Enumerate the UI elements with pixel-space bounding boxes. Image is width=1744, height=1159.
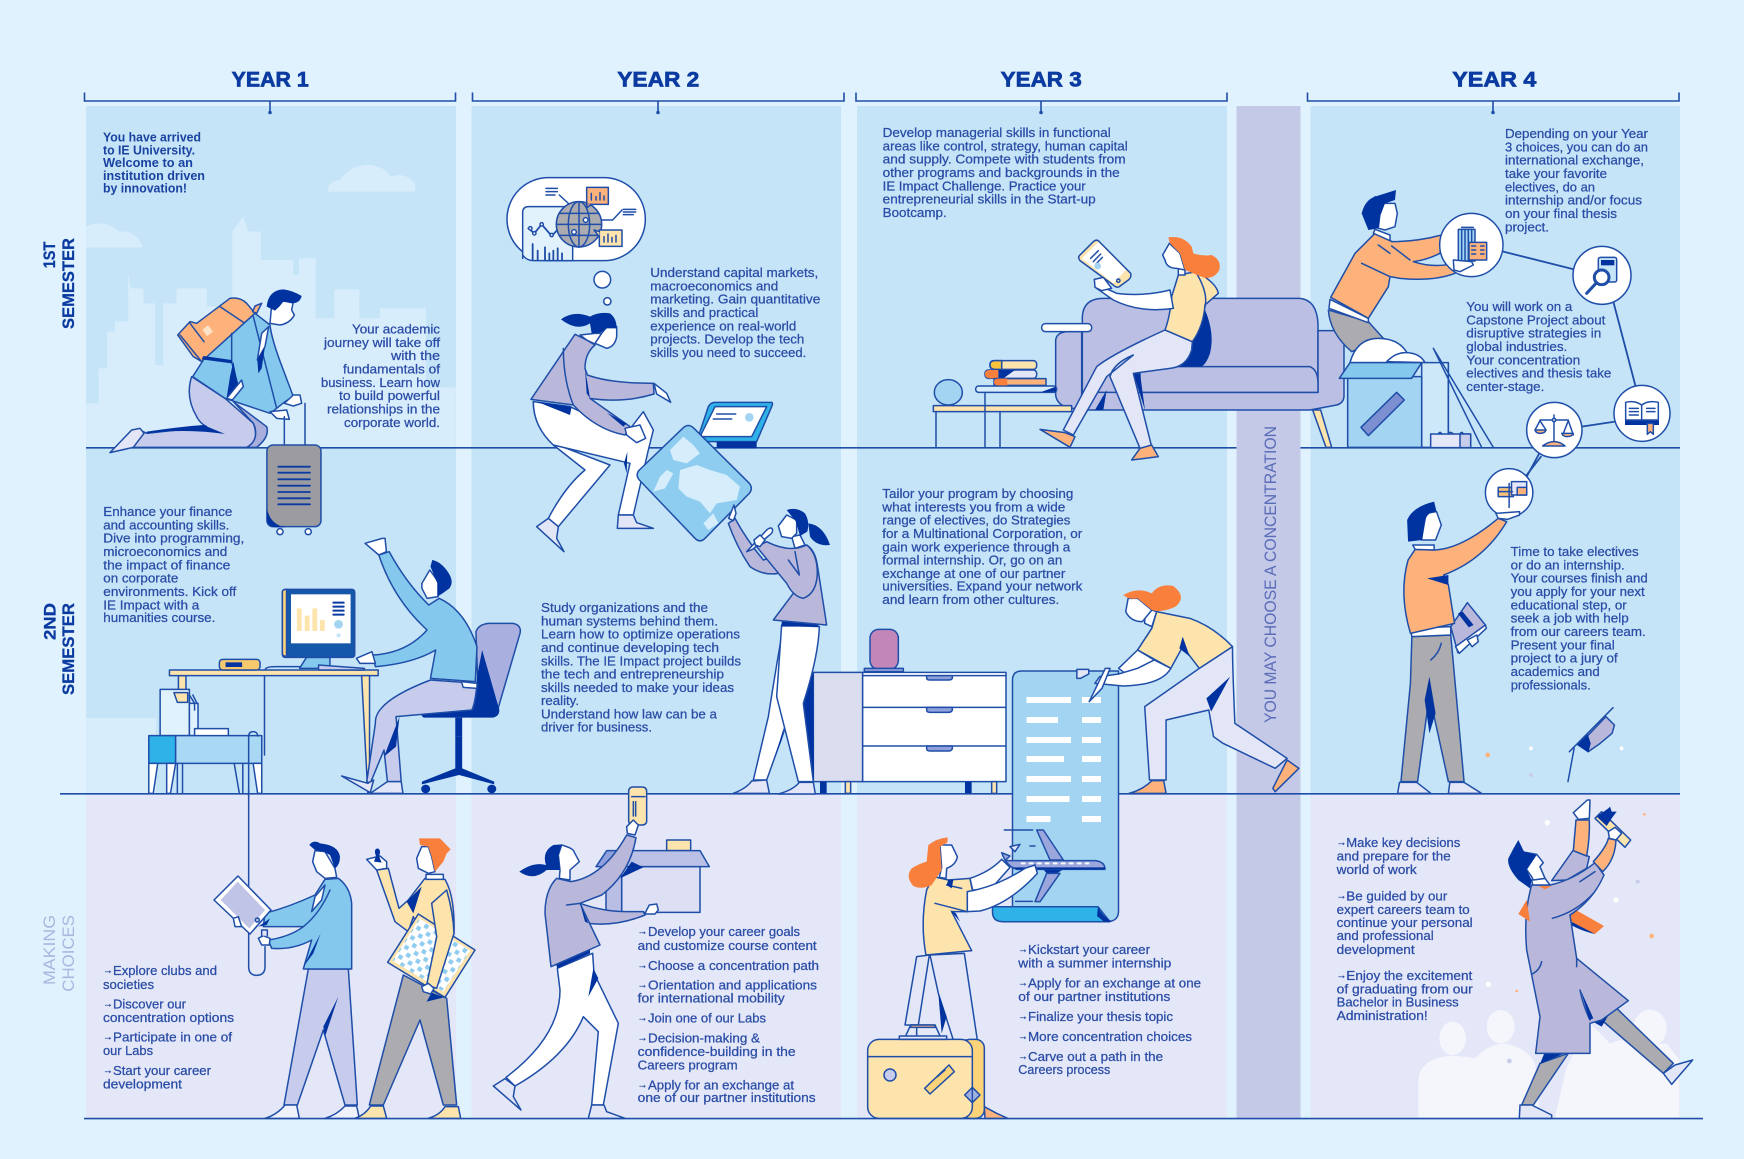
illustration: flying graduation cap with confetti [1485, 708, 1623, 782]
icon circle: book [1614, 385, 1670, 441]
list: year 2 making choices: confidence-building in the [638, 1044, 796, 1059]
list: year 2 making choices: → [638, 960, 648, 971]
text: year 3 semester 2: and learn from other cultures. [882, 592, 1059, 607]
text: year 1 welcome [103, 130, 205, 196]
list: year 2 making choices: Decision-making & [648, 1030, 760, 1046]
text: year 4 semester 2: academics and [1511, 664, 1600, 679]
illustration: year 4 man with icon circles [1328, 190, 1670, 477]
illustration: sofa and side table [933, 298, 1344, 448]
text: year 4 semester 2: Present your final [1511, 637, 1615, 652]
text: year 3 semester 2: what interests you from a wide [881, 499, 1065, 514]
thought bubble [507, 178, 645, 305]
illustration: scroll list [992, 671, 1118, 922]
text: year 1 semester 1: with the [390, 348, 440, 363]
text: year 1 semester 1: corporate world. [344, 415, 440, 430]
list: year 4 making choices: and prepare for the [1337, 848, 1451, 864]
row label: 1st semester: 1ST [40, 241, 59, 268]
list: year 4 making choices [1336, 835, 1473, 1023]
crowd silhouettes [1418, 1010, 1679, 1117]
connecting lines [1503, 252, 1636, 477]
text: year 2 semester 1: marketing. Gain quantitative [650, 292, 820, 307]
list: year 2 making choices: Orientation and applications [648, 978, 817, 992]
text: year 4 semester 1 capstone: electives and thesis take [1466, 366, 1611, 381]
panel: year columns [86, 106, 1680, 1118]
illustration: student with tablet [214, 790, 359, 1118]
list: year 4 making choices: → [1336, 837, 1346, 848]
list: year 1 making choices: → [103, 1032, 113, 1043]
icon circle: buildings [1440, 213, 1503, 277]
list: year 4 making choices: and professional [1337, 928, 1434, 943]
text: year 3 semester 2 [881, 486, 1083, 607]
text: year 3 semester 2: exchange at one of our partner [882, 566, 1066, 581]
text: year 1 semester 2: environments. Kick off [103, 584, 237, 599]
text: year 3 semester 1 [883, 125, 1128, 220]
row label: 2nd semester [40, 603, 78, 695]
text: year 4 semester 1 capstone: disruptive strategies in [1466, 326, 1601, 341]
title: year 2: YEAR 2 [617, 69, 699, 92]
band label: concentration: YOU MAY CHOOSE A CONCENTRATION [1261, 426, 1280, 723]
text: year 4 semester 2: from our careers team. [1511, 624, 1646, 639]
row label: 2nd semester: 2ND [40, 603, 60, 640]
icon circle: flag [1485, 457, 1541, 517]
row label: 2nd semester: SEMESTER [59, 603, 78, 695]
text: year 3 semester 1: IE Impact Challenge. Practice your [883, 178, 1086, 193]
text: year 3 semester 1: entrepreneurial skills in the Start-up [883, 192, 1096, 207]
list: year 3 making choices: Finalize your thesis topic [1028, 1009, 1174, 1024]
text: year 2 semester 2: human systems behind them. [541, 613, 718, 628]
text: year 2 semester 2: Study organizations and the [541, 600, 708, 615]
row label: making choices: MAKING [40, 915, 59, 985]
text: year 3 semester 1: areas like control, strategy, human capital [883, 138, 1128, 153]
title: year 4: YEAR 4 [1452, 69, 1537, 92]
text: year 4 semester 1 capstone: global industries. [1466, 339, 1567, 354]
text: year 4 semester 1 top: Depending on your Year [1505, 126, 1649, 141]
text: year 4 semester 1 top: international exchange, [1505, 153, 1644, 168]
title: year 3: YEAR 3 [1001, 69, 1082, 92]
text: year 2 semester 2: skills. The IE Impact project builds [541, 653, 741, 668]
list: year 1 making choices: Discover our [113, 996, 187, 1012]
text: year 3 semester 2: universities. Expand your network [882, 579, 1083, 594]
row label: making choices: CHOICES [59, 915, 78, 992]
list: year 4 making choices: of graduating from our [1337, 982, 1473, 996]
text: year 4 semester 1 top: on your final thesis [1505, 206, 1617, 221]
list: year 3 making choices: → [1018, 1031, 1028, 1042]
text: year 4 semester 1 capstone: center-stage. [1466, 379, 1544, 394]
list: year 3 making choices: → [1018, 1011, 1028, 1022]
text: year 1 semester 2: and accounting skills. [103, 517, 229, 532]
row label: 1st semester [40, 238, 78, 329]
text: year 4 semester 2: Time to take electives [1511, 544, 1639, 559]
list: year 4 making choices: expert careers team to [1337, 902, 1470, 917]
illustration: year 3 woman writing [1077, 585, 1299, 793]
illustration: year 2 woman with thought bubble and laptop [507, 178, 772, 552]
text: year 4 semester 1 top: project. [1505, 219, 1549, 234]
box [596, 840, 709, 912]
list: year 1 making choices: concentration options [103, 1010, 234, 1025]
text: year 2 semester 2: skills needed to make your ideas [541, 680, 734, 695]
text: year 1 semester 2: the impact of finance [103, 557, 230, 572]
illustration: woman with box [493, 787, 709, 1118]
text: year 2 semester 1: experience on real-world [650, 318, 796, 333]
list: year 3 making choices: Careers process [1018, 1062, 1110, 1077]
text: year 1 semester 2: Dive into programming, [103, 531, 244, 546]
text: year 2 semester 1: skills and practical [650, 305, 758, 320]
text: year 1 semester 1: relationships in the [327, 402, 440, 416]
text: year 1 welcome: to IE University. [103, 142, 195, 157]
text: year 3 semester 2: gain work experience through a [882, 539, 1071, 554]
text: year 1 semester 2: on corporate [103, 571, 178, 586]
illustration: desk with student at computer [149, 538, 520, 797]
text: year 4 semester 2: project to a jury of [1511, 651, 1618, 666]
text: year 2 semester 1: Understand capital markets, [650, 265, 818, 280]
list: year 4 making choices: → [1336, 891, 1346, 902]
list: year 1 making choices [103, 963, 234, 1092]
text: year 1 semester 1: fundamentals of [343, 362, 440, 376]
list: year 1 making choices: Explore clubs and [113, 963, 217, 978]
illustration: year 2 woman with pen [728, 505, 1006, 794]
list: year 1 making choices: societies [103, 977, 154, 992]
text: year 4 semester 1 top: electives, do an [1505, 179, 1595, 194]
text: year 1 semester 1 [321, 322, 441, 430]
text: year 2 semester 2: driver for business. [541, 720, 652, 735]
list: year 2 making choices: → [638, 926, 648, 938]
text: year 4 semester 1 capstone: You will work on a [1466, 299, 1573, 314]
text: year 1 semester 2 [103, 504, 244, 625]
list: year 4 making choices: world of work [1336, 862, 1417, 877]
text: year 3 semester 2: for a Multinational Corporation, or [882, 526, 1083, 541]
list: year 4 making choices: Enjoy the excitement [1346, 968, 1473, 983]
list: year 3 making choices: with a summer internship [1017, 956, 1171, 970]
text: year 4 semester 1 top: 3 choices, you can do an [1505, 139, 1648, 154]
horizontal floor lines [60, 448, 1703, 1119]
list: year 2 making choices: Choose a concentration path [648, 958, 819, 973]
list: year 2 making choices: Careers program [638, 1058, 738, 1072]
list: year 3 making choices [1017, 942, 1201, 1077]
sideboard [813, 629, 1006, 793]
text: year 1 semester 1: journey will take off [323, 335, 440, 350]
list: year 2 making choices: Apply for an exchange at [648, 1078, 794, 1092]
list: year 2 making choices: → [638, 980, 648, 991]
list: year 2 making choices: → [638, 1013, 648, 1024]
list: year 2 making choices: Join one of our Labs [648, 1010, 766, 1026]
text: year 1 welcome: You have arrived [103, 130, 201, 144]
text: year 4 semester 2: educational step, or [1511, 597, 1627, 612]
list: year 2 making choices: one of our partner institutions [638, 1090, 816, 1105]
text: year 4 semester 1 capstone: Your concentration [1466, 352, 1580, 367]
list: year 4 making choices: Bachelor in Business [1337, 994, 1459, 1010]
list: year 4 making choices: Make key decisions [1346, 835, 1460, 850]
list: year 1 making choices: development [103, 1076, 182, 1092]
text: year 3 semester 1: Bootcamp. [883, 205, 947, 220]
text: year 1 semester 2: IE Impact with a [103, 597, 200, 612]
list: year 2 making choices: → [638, 1080, 648, 1091]
text: year 3 semester 1: other programs and backgrounds in the [883, 165, 1120, 180]
list: year 2 making choices: Develop your career goals [648, 924, 800, 939]
list: year 3 making choices: of our partner institutions [1018, 989, 1170, 1004]
text: year 1 welcome: Welcome to an [103, 155, 193, 170]
text: year 2 semester 1: projects. Develop the tech [650, 332, 804, 347]
title: year 1: YEAR 1 [232, 69, 309, 92]
text: year 1 semester 1: to build powerful [339, 388, 440, 403]
list: year 4 making choices: development [1337, 942, 1415, 957]
text: year 4 semester 2: or do an internship. [1511, 557, 1625, 572]
text: year 4 semester 1 top: take your favorite [1505, 166, 1607, 181]
illustration: suitcase [267, 445, 321, 535]
text: year 1 semester 1: Your academic [352, 322, 441, 336]
text: year 2 semester 2: the tech and entrepreneurship [541, 667, 724, 682]
text: year 1 semester 1: business. Learn how [321, 375, 441, 390]
text: year 2 semester 1: skills you need to succeed. [650, 345, 806, 360]
text: year 3 semester 1: and supply. Compete with students from [883, 152, 1126, 167]
text: year 1 semester 2: Enhance your finance [103, 504, 232, 519]
text: year 4 semester 2: professionals. [1511, 677, 1591, 692]
icon circle: scales [1527, 402, 1582, 458]
list: year 4 making choices: → [1336, 970, 1346, 982]
text: year 4 semester 2: seek a job with help [1511, 611, 1629, 626]
illustration: woman with airplane and suitcase [868, 830, 1105, 1118]
list: year 2 making choices: for international mobility [638, 990, 785, 1006]
text: year 4 semester 1 top: internship and/or focus [1505, 193, 1642, 208]
illustration: graduate with crowd [1418, 800, 1693, 1118]
laptop [697, 402, 772, 448]
text: year 2 semester 1: macroeconomics and [650, 278, 778, 293]
list: year 1 making choices: → [103, 999, 113, 1010]
text: year 3 semester 2: range of electives, do Strategies [882, 513, 1070, 528]
list: year 1 making choices: Start your career [113, 1063, 212, 1078]
text: year 2 semester 2: Understand how law can be a [541, 706, 718, 721]
text: year 2 semester 2: Learn how to optimize operations [541, 627, 740, 642]
text: year 4 semester 1 capstone [1466, 299, 1611, 394]
list: year 4 making choices: Administration! [1337, 1008, 1428, 1023]
chair [421, 623, 520, 793]
row label: making choices [40, 915, 78, 992]
text: year 4 semester 2: you apply for your next [1511, 584, 1645, 599]
illustration: year 4 man holding circle, second semester [1398, 457, 1541, 793]
list: year 1 making choices: → [103, 966, 113, 976]
text: year 4 semester 2: Your courses finish and [1511, 571, 1648, 586]
list: year 3 making choices: Carve out a path in the [1028, 1049, 1163, 1064]
list: year 1 making choices: → [103, 1065, 113, 1076]
list: year 2 making choices [638, 924, 819, 1105]
list: year 2 making choices: and customize course content [638, 938, 817, 953]
list: year 3 making choices: Apply for an exchange at one [1028, 976, 1201, 990]
text: year 3 semester 2: Tailor your program by choosing [882, 486, 1073, 501]
illustration: year 3 woman reading on sofa [1040, 237, 1220, 460]
panel: concentration band [1236, 106, 1300, 1118]
icon circle: calculator and magnifier [1573, 246, 1631, 304]
text: year 2 semester 2: and continue developing tech [541, 640, 719, 655]
text: year 1 semester 2: microeconomics and [103, 544, 227, 559]
text: year 3 semester 2: formal internship. Or, go on an [882, 553, 1062, 568]
text: year 2 semester 2 [541, 600, 741, 735]
desk and computer [149, 589, 378, 797]
row label: 1st semester: SEMESTER [59, 238, 78, 329]
year brackets [84, 92, 1679, 114]
illustration: student with chess board [355, 838, 475, 1118]
text: year 4 semester 1 top [1505, 126, 1649, 234]
list: year 3 making choices: Kickstart your career [1028, 942, 1151, 957]
text: year 4 semester 1 capstone: Capstone Project about [1466, 312, 1606, 327]
text: year 2 semester 1 [650, 265, 820, 360]
list: year 3 making choices: → [1018, 1051, 1028, 1062]
text: year 3 semester 1: Develop managerial skills in functional [883, 125, 1111, 140]
text: year 1 welcome: institution driven [103, 168, 205, 183]
list: year 1 making choices: Participate in one of [113, 1030, 232, 1044]
list: year 1 making choices: our Labs [103, 1043, 153, 1058]
illustration: city skyline background [86, 165, 456, 448]
text: year 1 semester 2: humanities course. [103, 610, 215, 625]
list: year 3 making choices: More concentration choices [1028, 1029, 1192, 1044]
illustration: year 1 kneeling student with backpack [110, 289, 310, 453]
text: year 1 welcome: by innovation! [103, 181, 187, 196]
list: year 3 making choices: → [1018, 978, 1028, 989]
list: year 3 making choices: → [1018, 944, 1028, 955]
list: year 4 making choices: Be guided by our [1346, 888, 1448, 904]
text: year 2 semester 2: reality. [541, 693, 579, 708]
illustration: world map tablet [637, 425, 751, 541]
list: year 2 making choices: → [638, 1033, 648, 1044]
list: year 4 making choices: continue your personal [1337, 915, 1473, 930]
text: year 4 semester 2 [1511, 544, 1648, 692]
